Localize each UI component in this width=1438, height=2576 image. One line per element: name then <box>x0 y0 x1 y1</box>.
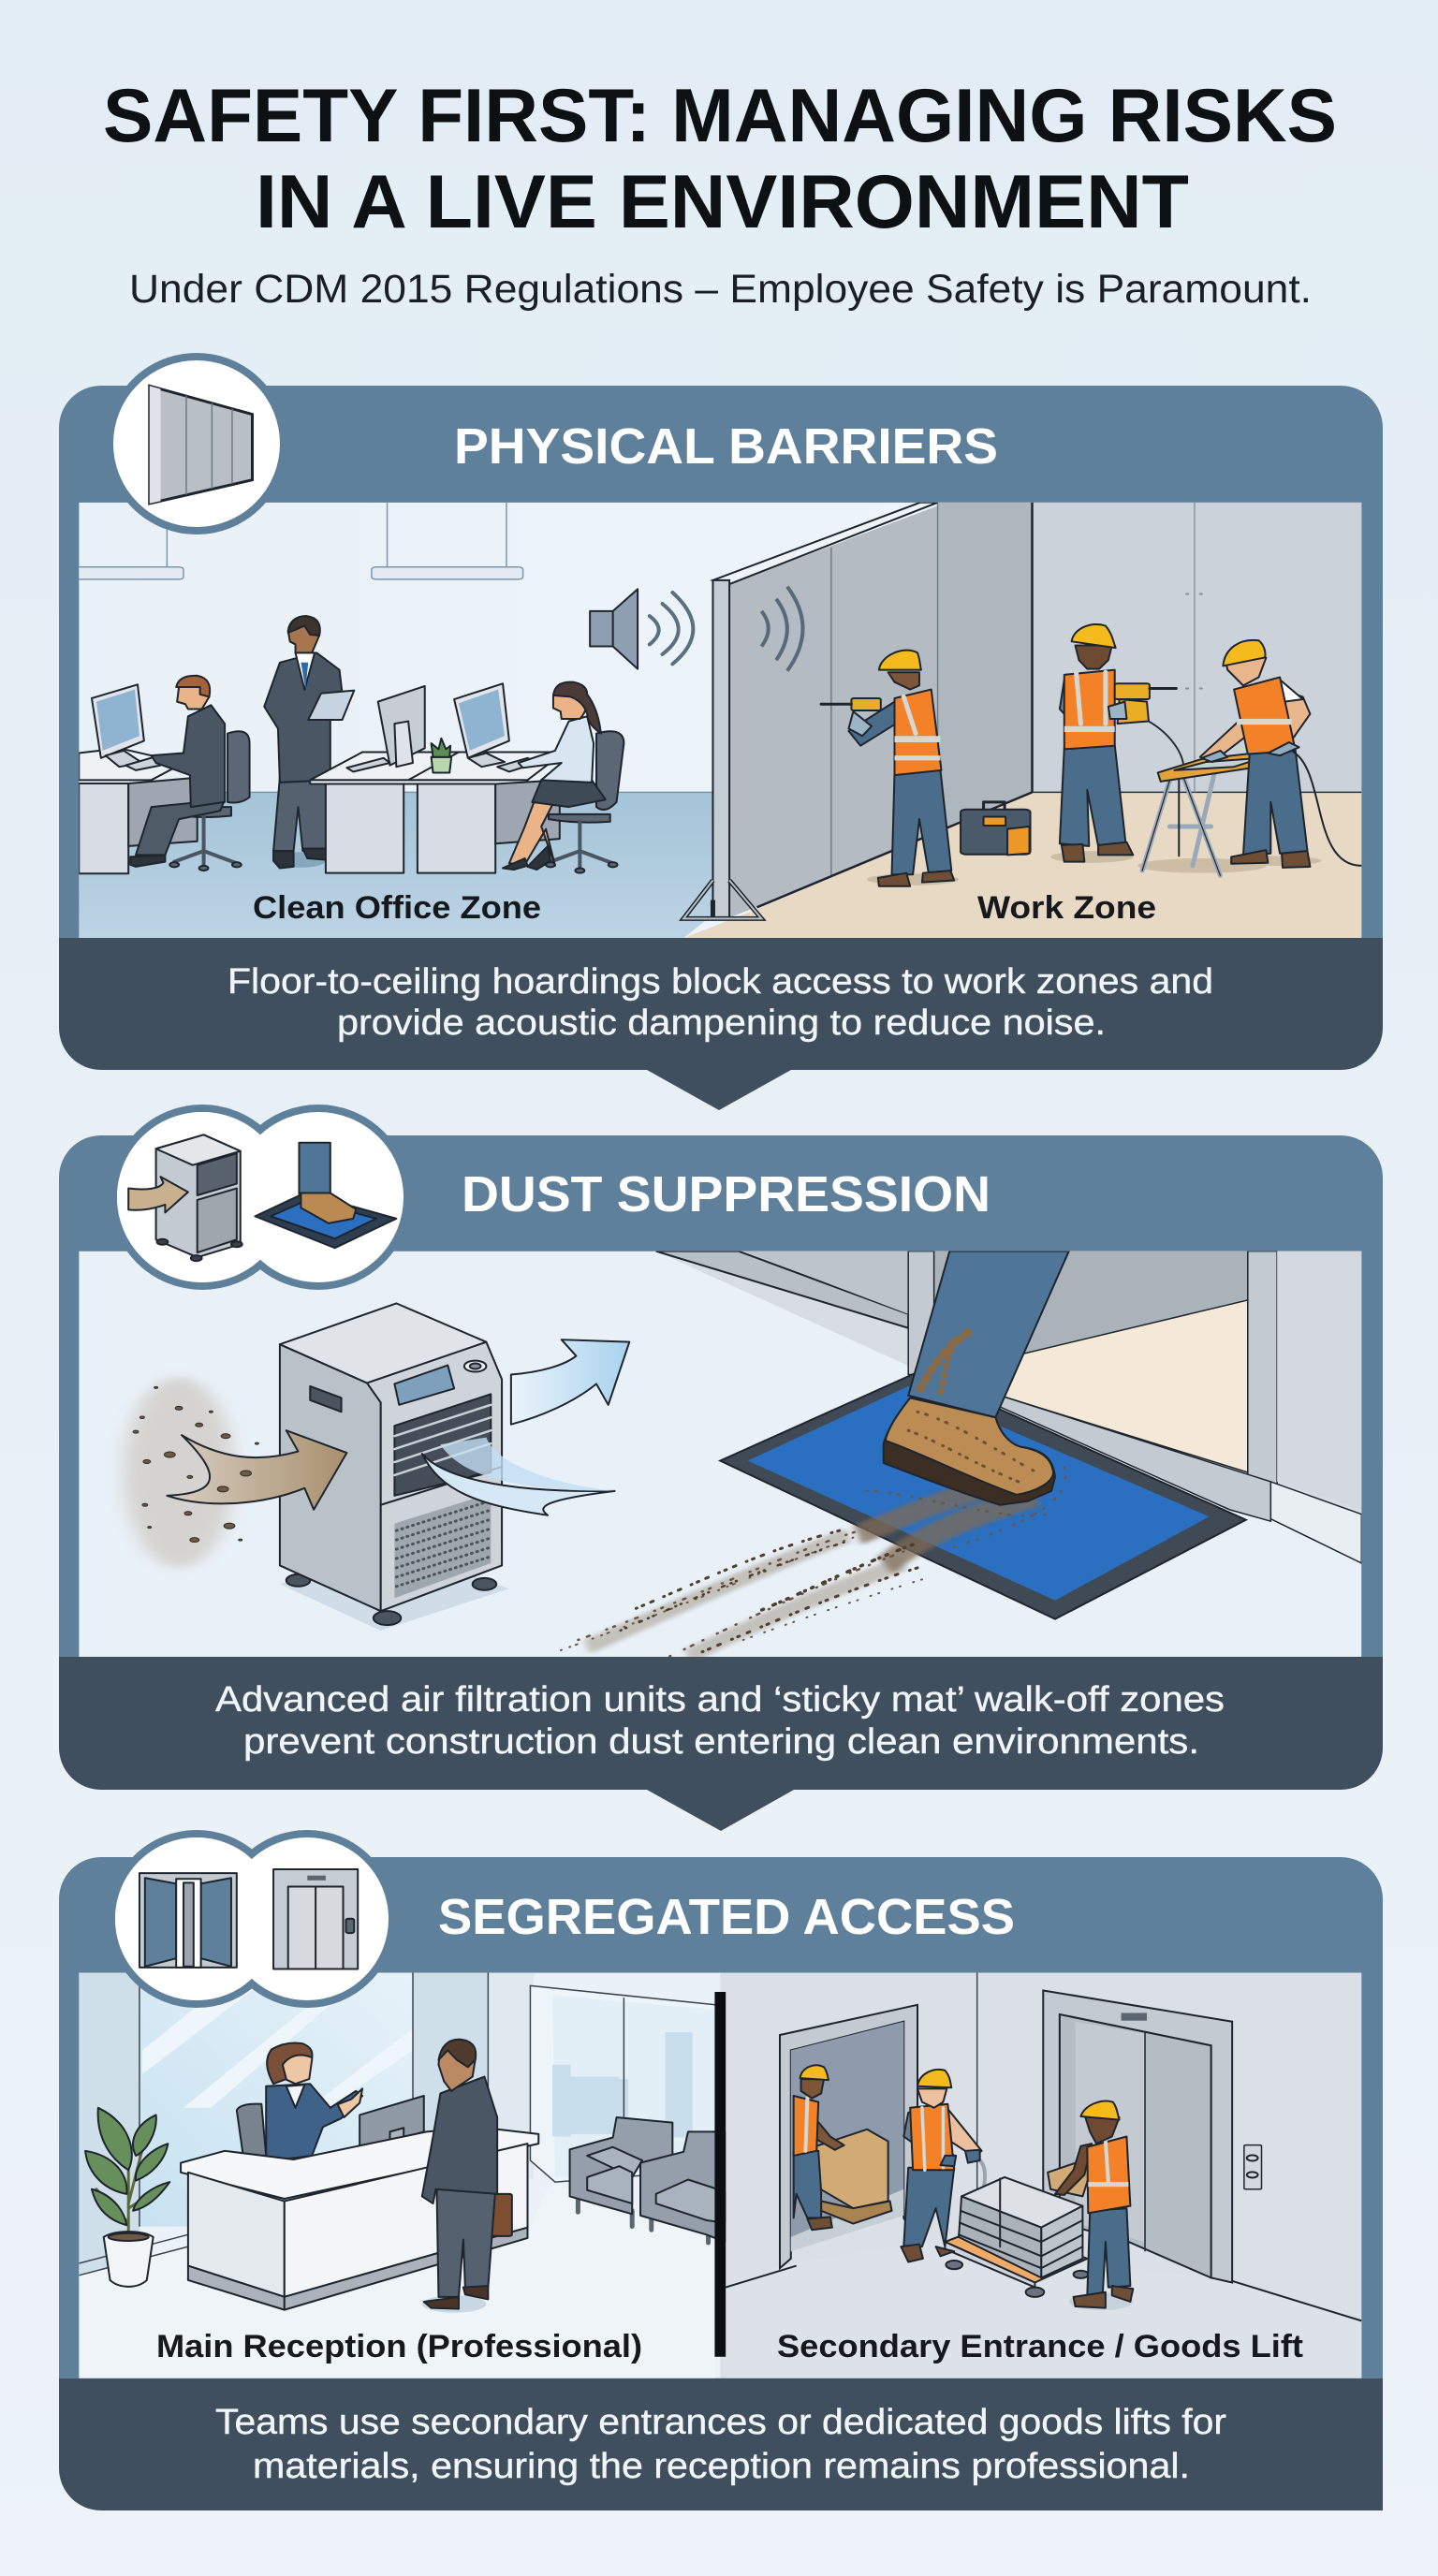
title: SAFETY FIRST: MANAGING RISKS <box>103 74 1337 158</box>
seated man <box>130 676 250 871</box>
goods trolley <box>945 2156 1088 2297</box>
third worker <box>1200 640 1361 868</box>
panel: physical barriers <box>59 357 1383 1070</box>
sticky mat <box>720 1372 1246 1619</box>
armchairs <box>570 2117 725 2243</box>
caption band 2 <box>59 1657 1383 1790</box>
dust trail on floor <box>550 1468 1065 1656</box>
zone label: clean office: Clean Office Zone <box>253 890 541 926</box>
illustration: reception and goods entrance <box>79 1973 1362 2378</box>
speaker <box>590 589 693 669</box>
walking leg and boot <box>884 1251 1069 1505</box>
doorway <box>656 1251 1361 1563</box>
centre desks <box>310 683 565 873</box>
dirty air arrow <box>124 1377 346 1568</box>
zone label: main reception: Main Reception (Professional) <box>156 2329 642 2364</box>
caption band 2: Advanced air filtration units and ‘sticky mat’ walk-off zones <box>215 1680 1225 1720</box>
caption band 1 <box>59 938 1383 1070</box>
caption band 3: Teams use secondary entrances or dedicated goods lifts for <box>215 2403 1226 2442</box>
panel: dust suppression <box>59 1108 1383 1790</box>
caption band 3 <box>59 2378 1383 2510</box>
arrow: panel 1 to panel 2 <box>647 1070 791 1110</box>
title: IN A LIVE ENVIRONMENT <box>256 160 1189 244</box>
panel 1 background <box>59 386 1383 938</box>
panel 2 background <box>59 1135 1383 1657</box>
worker with box <box>794 2065 892 2230</box>
zone label: work zone: Work Zone <box>977 890 1156 926</box>
heading: physical barriers: PHYSICAL BARRIERS <box>454 418 998 475</box>
icons: air unit and mat <box>113 1108 407 1286</box>
second worker with drill <box>1050 624 1183 863</box>
reception room <box>79 1973 715 2378</box>
plant <box>85 2108 169 2287</box>
title <box>103 74 1337 244</box>
icon: hoarding panel <box>110 357 284 531</box>
seated woman <box>503 682 624 873</box>
divider <box>714 1992 726 2357</box>
heading: dust suppression: DUST SUPPRESSION <box>462 1166 990 1222</box>
left desk <box>79 684 198 873</box>
air filtration unit <box>280 1303 509 1631</box>
lift doors <box>1043 1990 1232 2282</box>
panel 3 background <box>59 1857 1383 2378</box>
caption band 1: Floor-to-ceiling hoardings block access to work zones and <box>227 962 1213 1002</box>
caption band 1: provide acoustic dampening to reduce noise. <box>337 1003 1106 1043</box>
clean air arrows <box>422 1339 629 1515</box>
worker with drill at barrier <box>821 651 959 886</box>
zone label: secondary entrance: Secondary Entrance / Goods Lift <box>777 2329 1303 2364</box>
icons: double doors and lift <box>111 1834 392 2004</box>
toolbox <box>961 802 1031 855</box>
hoarding barrier <box>683 503 1032 918</box>
subtitle: Under CDM 2015 Regulations – Employee Safety is Paramount. <box>129 267 1312 312</box>
standing man <box>264 616 354 868</box>
illustration: clean office zone and work zone <box>65 503 1361 938</box>
caption band 2: prevent construction dust entering clean environments. <box>243 1722 1199 1762</box>
panel: segregated access <box>59 1834 1383 2510</box>
heading: segregated access: SEGREGATED ACCESS <box>438 1889 1015 1945</box>
visitor with briefcase <box>422 2040 512 2313</box>
reception desk <box>181 2096 538 2310</box>
worker carrying box to lift <box>1048 2101 1133 2310</box>
arrow: panel 2 to panel 3 <box>647 1790 794 1831</box>
worker pushing trolley <box>901 2070 982 2261</box>
lights <box>65 503 523 579</box>
goods entrance room <box>726 1973 1361 2378</box>
illustration: air filtration and sticky mat <box>79 1251 1361 1657</box>
sawhorse workbench <box>1137 753 1266 878</box>
caption band 3: materials, ensuring the reception remains professional. <box>253 2447 1190 2486</box>
receptionist <box>237 2042 362 2161</box>
